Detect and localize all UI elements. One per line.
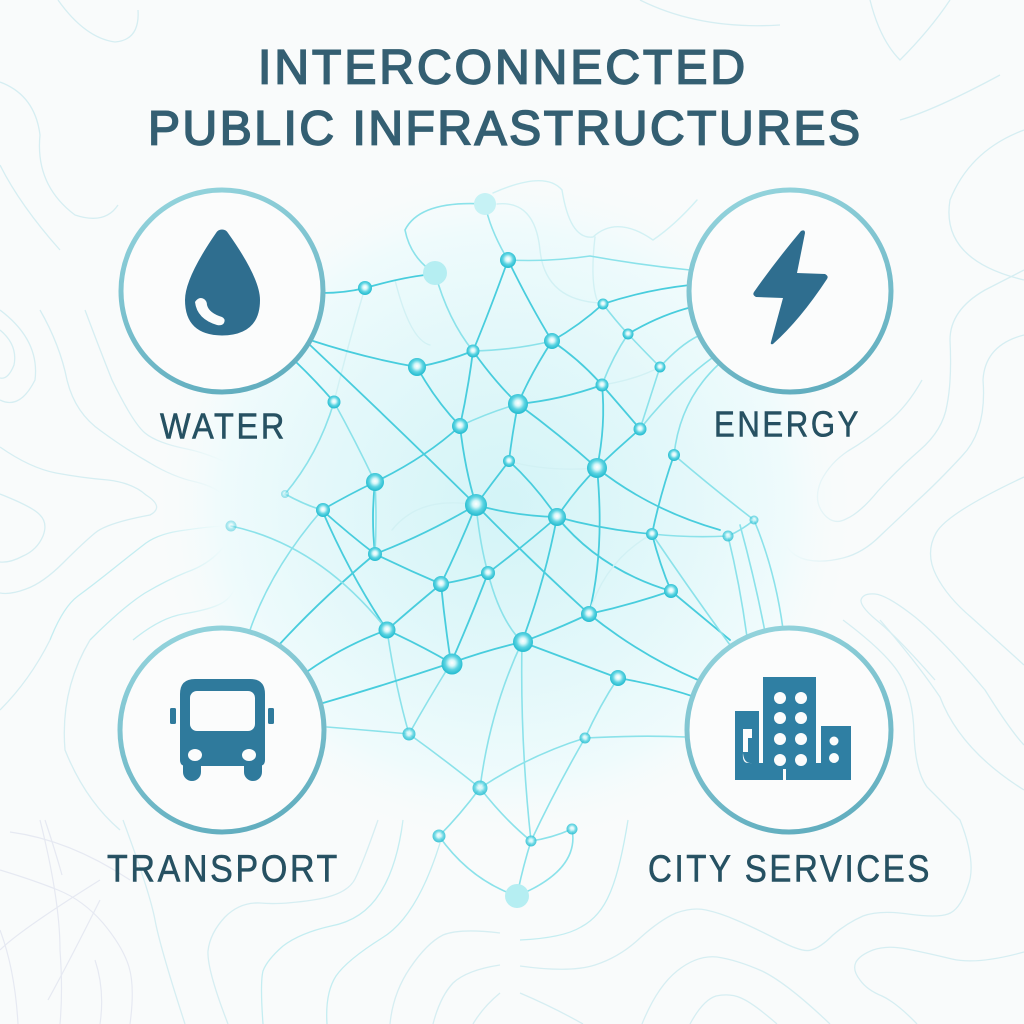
icon: lightning bolt [753,230,828,344]
panel: city services [648,628,932,890]
title: PUBLIC INFRASTRUCTURES [148,102,860,156]
network nodes [226,193,758,908]
icon: bus [170,679,274,781]
energy ring [689,190,891,392]
water ring [121,190,323,392]
label: city services: CITY SERVICES [648,848,932,890]
network links [231,181,783,896]
central glow [150,160,860,850]
icon: buildings [735,677,851,780]
panel: transport [107,628,340,890]
icon: water drop [185,230,260,336]
label: transport: TRANSPORT [107,848,340,890]
title: INTERCONNECTED [258,42,745,94]
panel: water [121,190,323,446]
panel: energy [689,190,891,444]
title [148,42,860,156]
city ring [687,628,891,832]
transport ring [120,628,324,832]
label: energy: ENERGY [714,404,861,444]
label: water: WATER [160,406,287,446]
